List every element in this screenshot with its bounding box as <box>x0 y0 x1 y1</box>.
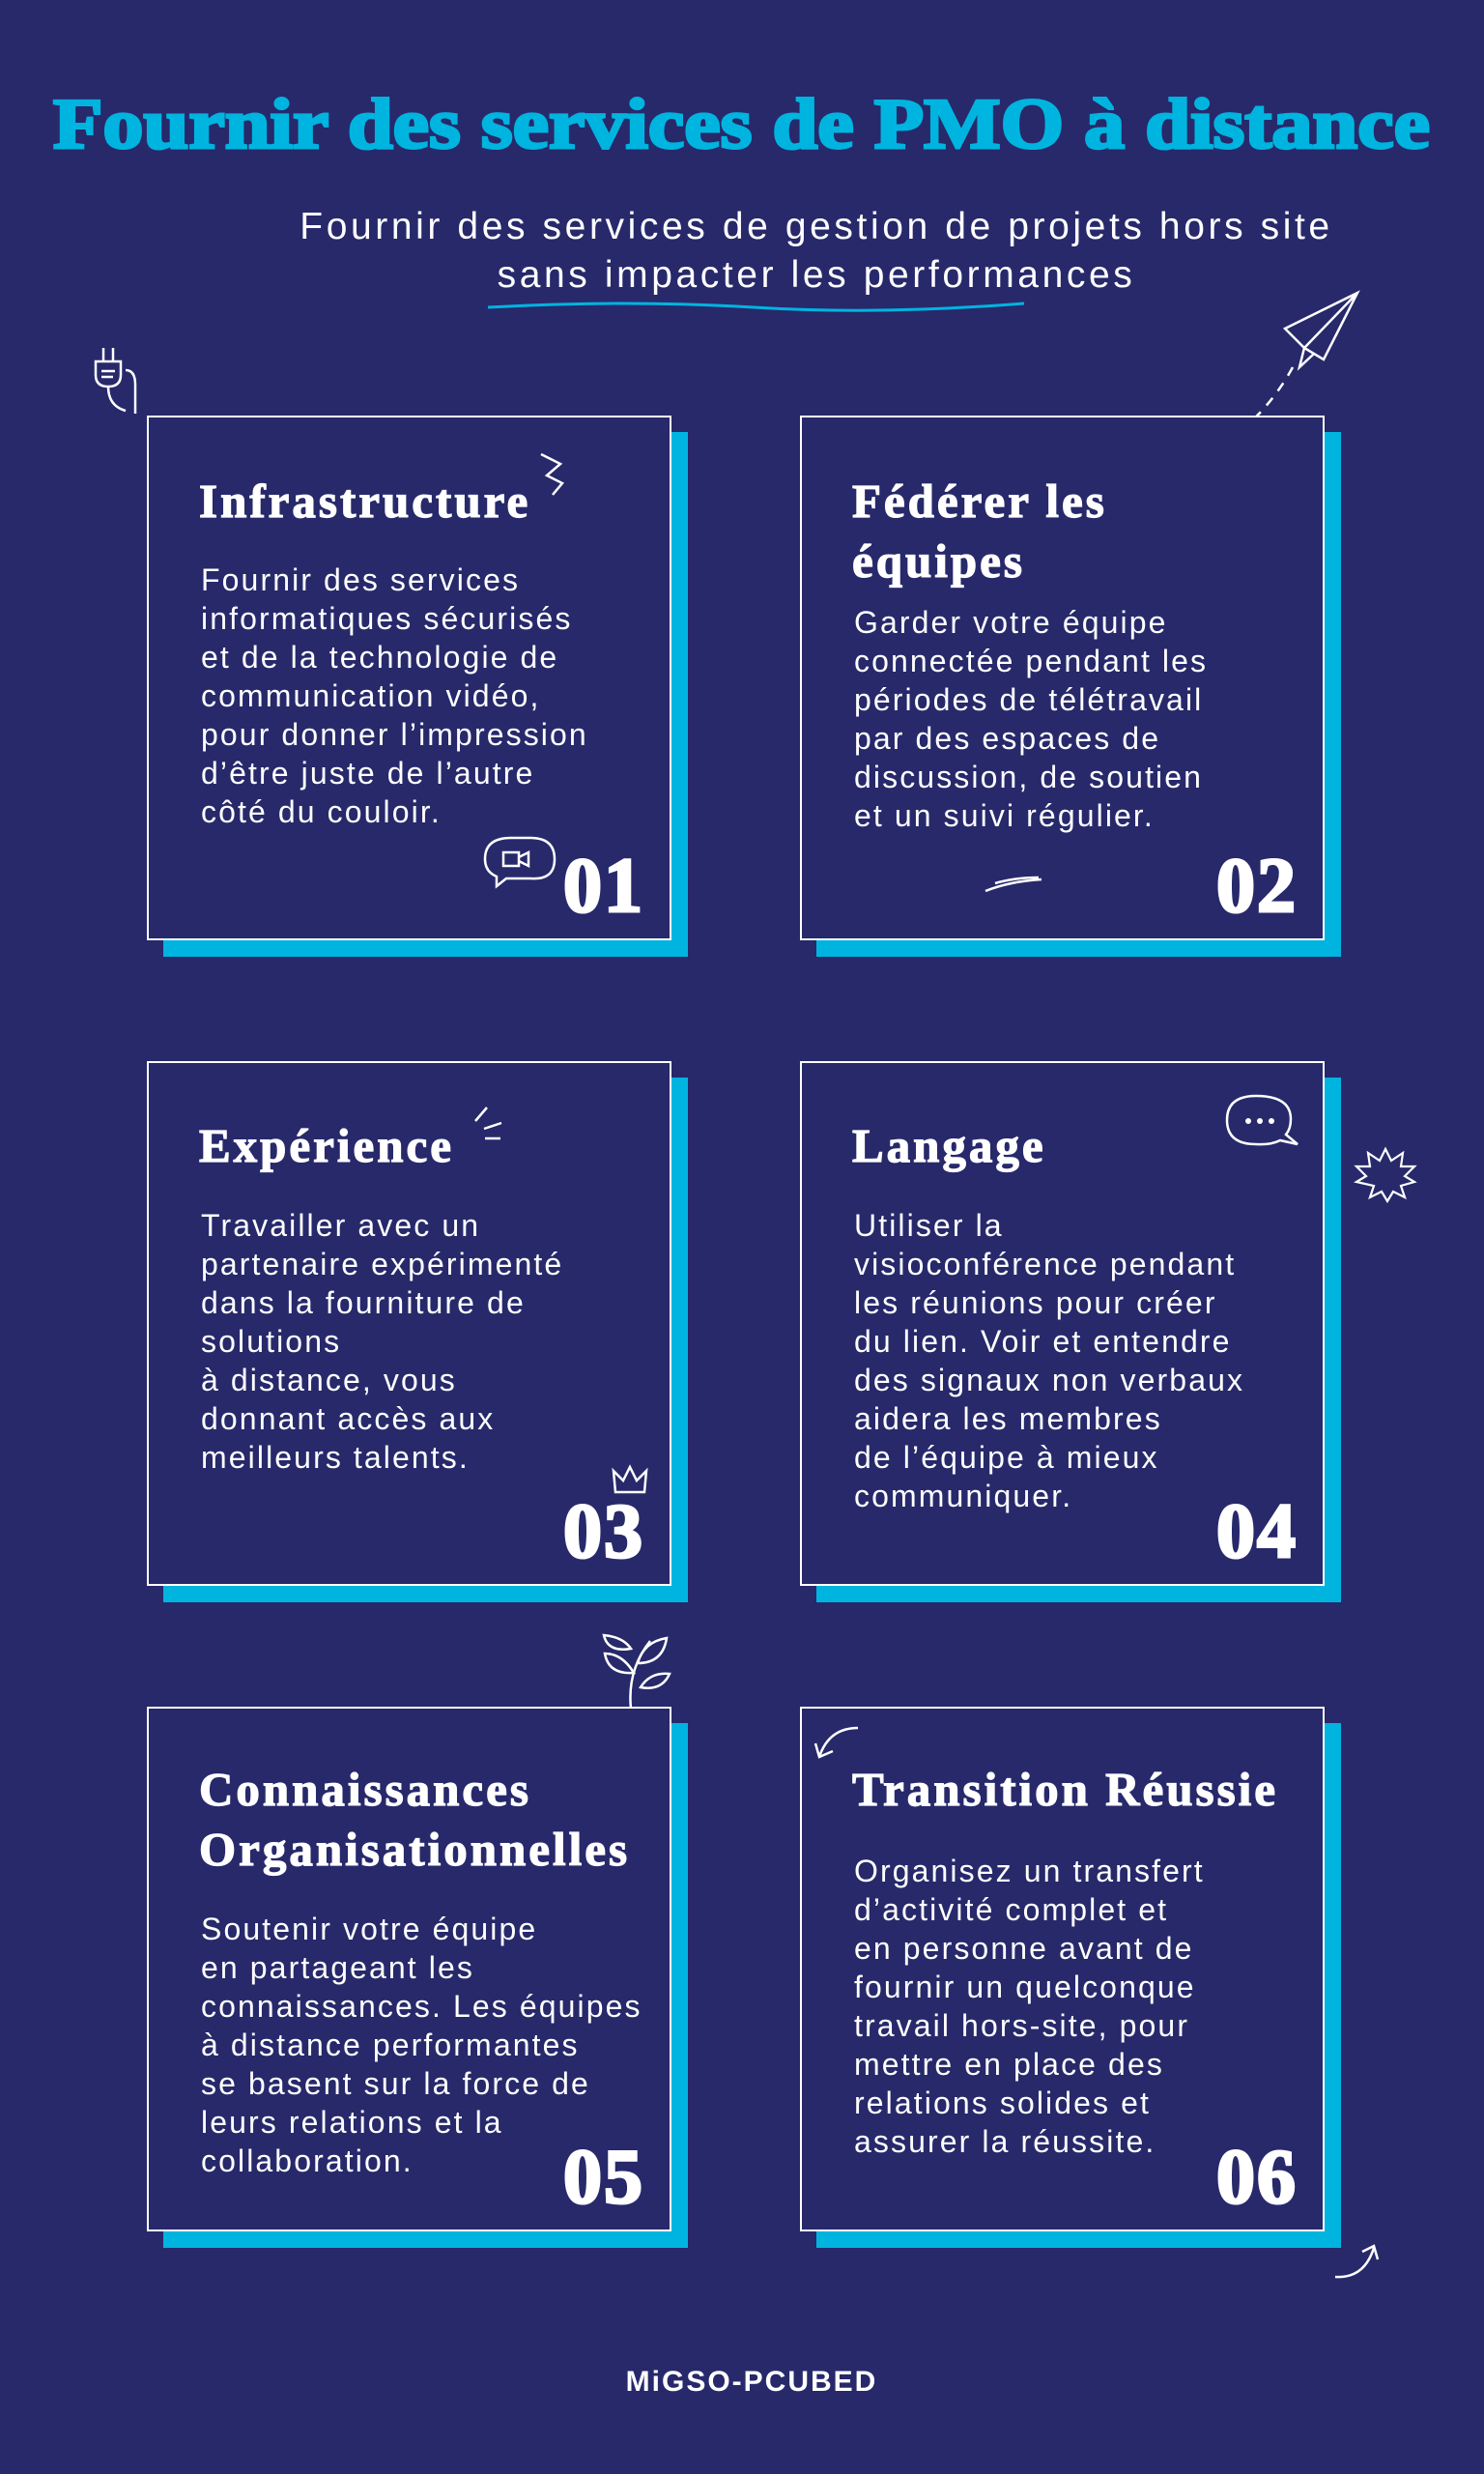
text block: aidera les membres <box>854 1401 1162 1436</box>
heading <box>852 475 1107 588</box>
text block: en personne avant de <box>854 1931 1194 1966</box>
text block: communiquer. <box>854 1479 1072 1513</box>
panel: card 5 <box>147 1707 688 2248</box>
text block: Travailler avec un <box>201 1208 480 1243</box>
heading: Langage <box>852 1119 1046 1172</box>
logo: MiGSO-PCUBED <box>626 2366 877 2398</box>
text block: Garder votre équipe <box>854 605 1168 640</box>
heading: Connaissances <box>199 1763 531 1816</box>
text block: collaboration. <box>201 2143 414 2178</box>
icon: crown <box>612 1464 648 1494</box>
text block: Fournir des services <box>201 562 520 597</box>
icon: video chat <box>483 837 556 889</box>
text block: connectée pendant les <box>854 644 1208 678</box>
text block <box>201 1208 563 1475</box>
text block: fournir un quelconque <box>854 1970 1196 2004</box>
text block: par des espaces de <box>854 721 1160 756</box>
heading: Fédérer les <box>852 475 1107 528</box>
heading: Organisationnelles <box>199 1823 630 1876</box>
text block: de l’équipe à mieux <box>854 1440 1159 1475</box>
icon: lightning <box>541 452 564 496</box>
icon: paper plane <box>1256 290 1360 416</box>
text block: Soutenir votre équipe <box>201 1912 537 1946</box>
text block: périodes de télétravail <box>854 682 1203 717</box>
text block: connaissances. Les équipes <box>201 1989 642 2024</box>
text block: à distance, vous <box>201 1363 457 1397</box>
text block: Utiliser la <box>854 1208 1004 1243</box>
text block: visioconférence pendant <box>854 1247 1236 1281</box>
text block <box>854 1854 1205 2159</box>
heading: Transition Réussie <box>852 1763 1278 1816</box>
panel: card 3 <box>147 1061 688 1602</box>
text block: des signaux non verbaux <box>854 1363 1244 1397</box>
text block: meilleurs talents. <box>201 1440 470 1475</box>
text block: travail hors-site, pour <box>854 2008 1189 2043</box>
number: 03 <box>563 1489 644 1574</box>
icon: swoosh <box>985 876 1042 893</box>
icon: arrow top-left <box>813 1726 858 1759</box>
text block: relations solides et <box>854 2086 1151 2120</box>
number: 02 <box>1216 844 1298 929</box>
subtitle: sans impacter les performances <box>498 254 1135 296</box>
heading: Expérience <box>199 1119 454 1172</box>
icon: plant <box>602 1633 671 1707</box>
text block: d’être juste de l’autre <box>201 756 534 791</box>
number: 06 <box>1216 2135 1298 2220</box>
icon: plug <box>95 348 137 414</box>
heading: équipes <box>852 534 1025 588</box>
number: 01 <box>563 844 644 929</box>
icon: speech bubble <box>1225 1094 1298 1146</box>
text block: côté du couloir. <box>201 794 442 829</box>
heading <box>199 1763 630 1877</box>
panel: card 2 <box>800 416 1341 957</box>
text block: dans la fourniture de <box>201 1285 526 1320</box>
text block: partenaire expérimenté <box>201 1247 563 1281</box>
text block: mettre en place des <box>854 2047 1164 2082</box>
text block <box>201 1912 642 2178</box>
text block: solutions <box>201 1324 341 1359</box>
panel: card 6 <box>800 1707 1341 2248</box>
text block: du lien. Voir et entendre <box>854 1324 1232 1359</box>
number: 05 <box>563 2135 644 2220</box>
subtitle: Fournir des services de gestion de projets hors site <box>300 206 1333 247</box>
title: Fournir des services de PMO à distance <box>53 85 1430 164</box>
text block: Organisez un transfert <box>854 1854 1205 1888</box>
text block: donnant accès aux <box>201 1401 495 1436</box>
icon: burst <box>1354 1146 1417 1203</box>
panel: card 1 <box>147 416 688 957</box>
text block: discussion, de soutien <box>854 760 1203 794</box>
text block: en partageant les <box>201 1950 474 1985</box>
icon: sparkle <box>474 1107 502 1140</box>
text block: leurs relations et la <box>201 2105 503 2140</box>
panel: card 4 <box>800 1061 1417 1602</box>
text block: communication vidéo, <box>201 678 540 713</box>
text block <box>201 562 588 829</box>
text block <box>854 605 1208 833</box>
text block: d’activité complet et <box>854 1892 1168 1927</box>
text block: les réunions pour créer <box>854 1285 1217 1320</box>
subtitle <box>300 206 1333 296</box>
text block <box>854 1208 1244 1513</box>
text block: se basent sur la force de <box>201 2066 590 2101</box>
icon: arrow bottom-right <box>1335 2244 1380 2279</box>
text block: assurer la réussite. <box>854 2124 1156 2159</box>
text block: et de la technologie de <box>201 640 558 675</box>
text block: à distance performantes <box>201 2028 580 2062</box>
text block: et un suivi régulier. <box>854 798 1155 833</box>
underline <box>487 302 1024 312</box>
text block: pour donner l’impression <box>201 717 588 752</box>
heading: Infrastructure <box>199 475 530 528</box>
text block: informatiques sécurisés <box>201 601 572 636</box>
number: 04 <box>1216 1489 1298 1574</box>
